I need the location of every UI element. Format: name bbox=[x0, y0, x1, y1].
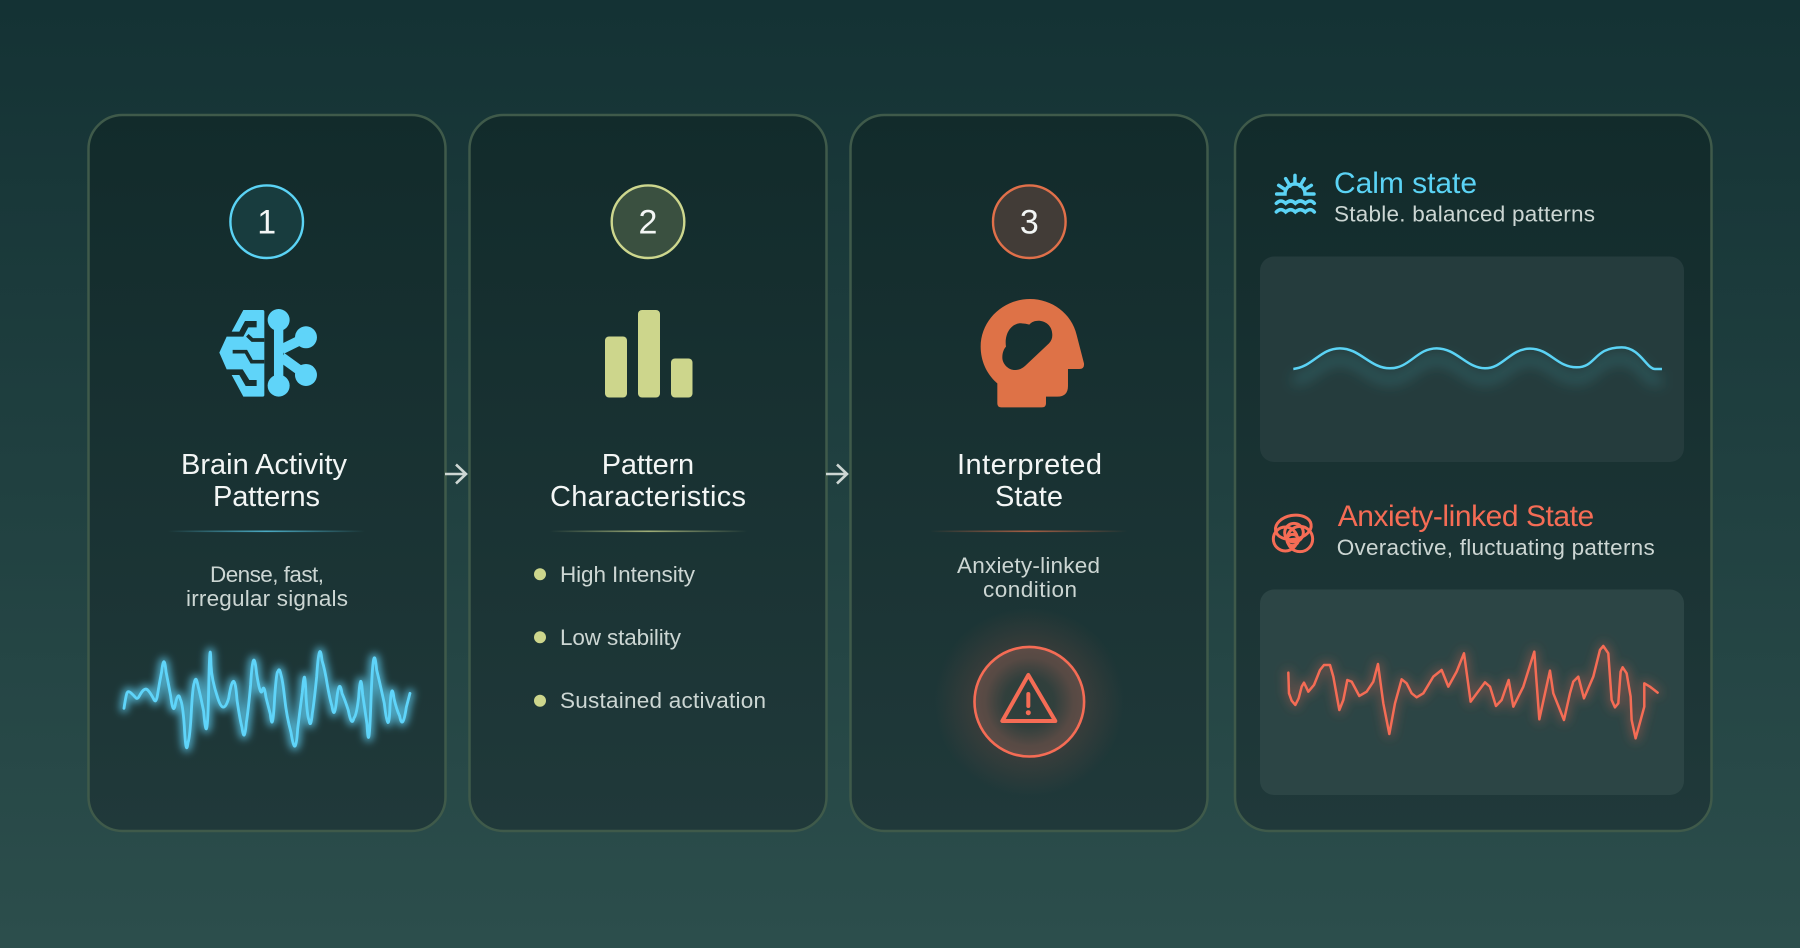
arrow: step 2 to step 3 bbox=[826, 464, 847, 484]
bullet: sustained activation: Sustained activation bbox=[560, 688, 766, 713]
divider 3 bbox=[930, 530, 1127, 532]
icon: circuit brain bbox=[219, 309, 317, 397]
icon: sun over waves bbox=[1276, 175, 1314, 212]
divider 2 bbox=[550, 530, 747, 532]
bullet: low stability: Low stability bbox=[560, 625, 682, 650]
panel: state comparison bbox=[1235, 115, 1712, 831]
divider 1 bbox=[168, 530, 365, 532]
heading: brain activity patterns: Brain Activity bbox=[181, 449, 348, 481]
chart panel: calm wave bbox=[1260, 256, 1684, 462]
heading: anxiety-linked state: Anxiety-linked State bbox=[1338, 500, 1594, 533]
description: dense signals: irregular signals bbox=[186, 586, 348, 611]
heading: pattern characteristics: Characteristics bbox=[550, 481, 746, 513]
icon: tangled circles bbox=[1273, 512, 1313, 552]
step number 3 bbox=[993, 185, 1066, 258]
description: anxiety-linked condition: condition bbox=[983, 577, 1077, 602]
description: anxiety: Overactive, fluctuating patterns bbox=[1337, 535, 1655, 560]
heading: brain activity patterns bbox=[181, 449, 348, 513]
bullet list bbox=[534, 562, 766, 713]
heading: interpreted state: Interpreted bbox=[957, 449, 1102, 481]
heading: pattern characteristics: Pattern bbox=[602, 449, 694, 481]
description: calm: Stable. balanced patterns bbox=[1334, 202, 1595, 227]
heading: calm state: Calm state bbox=[1334, 167, 1477, 200]
icon: head with cloud bbox=[981, 299, 1084, 407]
step number 1: 1 bbox=[257, 204, 276, 242]
icon: warning in glowing circle bbox=[934, 607, 1124, 797]
step number 3: 3 bbox=[1020, 204, 1039, 242]
panel: step 1 brain activity patterns bbox=[88, 115, 446, 831]
step number 2: 2 bbox=[639, 204, 657, 242]
heading: brain activity patterns: Patterns bbox=[213, 481, 320, 513]
heading: pattern characteristics bbox=[550, 449, 746, 513]
chart: dense brain waveform bbox=[124, 652, 410, 748]
bullet: high intensity: High Intensity bbox=[560, 562, 696, 587]
card 4 background bbox=[1235, 115, 1712, 831]
card 3 background bbox=[850, 115, 1208, 831]
card 2 background bbox=[470, 115, 826, 831]
description: anxiety-linked condition: Anxiety-linked bbox=[957, 553, 1100, 578]
step number 1 bbox=[230, 185, 303, 258]
heading: interpreted state bbox=[957, 449, 1102, 513]
panel: step 3 interpreted state bbox=[850, 115, 1208, 831]
chart panel: anxiety wave bbox=[1260, 590, 1684, 795]
step number 2 bbox=[612, 185, 684, 258]
description: anxiety-linked condition bbox=[957, 553, 1100, 602]
description: dense signals: Dense, fast, bbox=[210, 562, 324, 587]
card 1 background bbox=[88, 115, 446, 831]
panel: step 2 pattern characteristics bbox=[470, 115, 826, 831]
icon: bar chart bbox=[605, 310, 692, 398]
heading: interpreted state: State bbox=[995, 481, 1063, 513]
arrow: step 1 to step 2 bbox=[445, 464, 466, 484]
description: dense signals bbox=[186, 562, 348, 611]
